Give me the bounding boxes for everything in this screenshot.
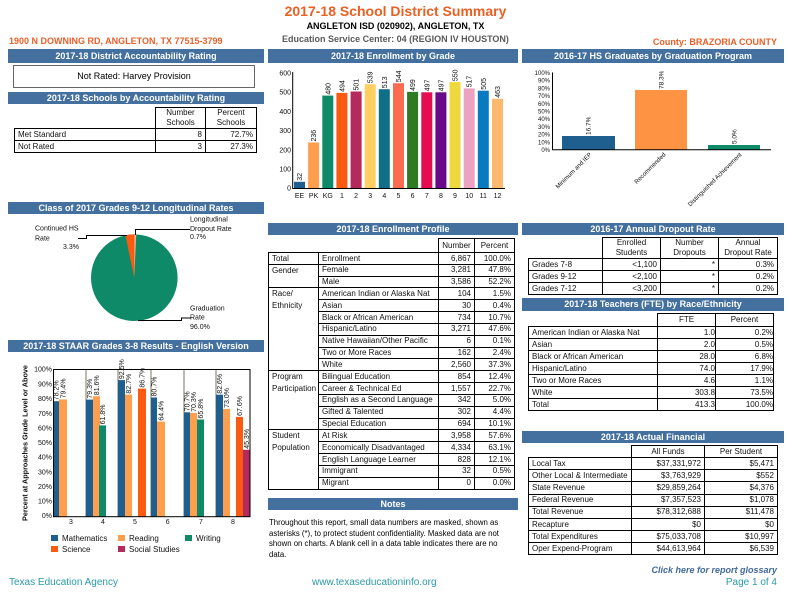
address: 1900 N DOWNING RD, ANGLETON, TX 77515-3799 (9, 36, 223, 46)
notes text: Throughout this report, small data numbers are masked, shown as (269, 518, 498, 527)
heading: longitudinal rates (8, 202, 264, 214)
bar chart: STAAR results: 79.3% (87, 379, 94, 399)
table: enrollment profile: Native Hawaiian/Other Pacific (322, 336, 428, 345)
table: financial: $1,078 (750, 495, 774, 504)
table: enrollment profile: 3,958 (451, 431, 471, 440)
table: enrollment profile: 6,867 (451, 254, 471, 263)
table: enrollment profile: 694 (458, 419, 471, 428)
table: enrollment profile: Ethnicity (272, 301, 302, 310)
rating box: Not Rated: Harvey Provision (77, 71, 191, 81)
table: schools by rating: Percent (217, 108, 245, 117)
table: financial: $29,859,264 (656, 483, 701, 492)
legend (51, 534, 221, 554)
heading: schools by accountability rating (8, 92, 264, 104)
table: dropout rate: Annual (736, 238, 760, 247)
table: dropout rate: Enrolled (617, 238, 646, 247)
bar chart: enrollment by grade: 7 (425, 193, 429, 200)
pie chart: longitudinal rates: Graduation (190, 306, 225, 312)
table: enrollment profile: White (322, 360, 342, 369)
table: teachers: 0.2% (755, 328, 773, 336)
table: financial: Total Expenditures (532, 532, 598, 541)
bar chart: enrollment by grade: 5 (397, 193, 401, 200)
bar chart: graduates by program: 16.7% (586, 116, 592, 135)
notes text: data. (269, 550, 286, 559)
table: enrollment profile: 104 (458, 289, 471, 298)
table: enrollment profile: 6 (467, 336, 471, 345)
table: enrollment profile: 828 (458, 455, 471, 464)
table: enrollment profile: Career & Technical Ed (322, 384, 401, 393)
table: enrollment profile: Asian (322, 301, 342, 310)
bar chart: graduates by program: 80% (538, 86, 551, 92)
table: dropout rate: Dropouts (673, 248, 706, 257)
table: enrollment profile: Male (322, 277, 339, 286)
bar chart: enrollment by grade: 2 (354, 193, 358, 200)
table: teachers: Black or African American (532, 352, 623, 360)
pie chart: longitudinal rates (35, 216, 232, 331)
table: financial: Federal Revenue (532, 495, 593, 504)
table: enrollment profile: Economically Disadvantaged (322, 443, 425, 452)
table: enrollment profile (268, 238, 515, 490)
table: enrollment profile: Bilingual Education (322, 372, 390, 381)
table: enrollment profile: English Language Learner (322, 455, 416, 464)
table: enrollment profile: 0.5% (493, 466, 511, 475)
bar chart: STAAR results: 10% (38, 498, 52, 506)
table: enrollment profile: 1,557 (451, 384, 471, 393)
bar chart: STAAR results: 6 (166, 519, 170, 526)
table: financial: Oper Expend-Program (532, 544, 612, 553)
rating box (13, 65, 255, 88)
table: enrollment profile: 3,586 (451, 277, 471, 286)
table: dropout rate: Grades 9-12 (532, 272, 576, 280)
table: dropout rate: * (712, 272, 715, 280)
heading: teachers (522, 298, 784, 311)
table: dropout rate: Grades 7-12 (532, 284, 576, 292)
bar chart: STAAR results: 8 (231, 519, 235, 526)
legend: Science (62, 545, 91, 554)
bar chart: enrollment by grade: 517 (467, 76, 474, 87)
footer: agency: Texas Education Agency (9, 577, 118, 588)
bar chart: STAAR results: 5 (133, 519, 137, 526)
bar chart: graduates by program: 40% (538, 117, 551, 123)
bar chart: STAAR results: 70% (38, 411, 52, 418)
table: teachers: American Indian or Alaska Nat (532, 328, 640, 336)
table: dropout rate: 0.3% (756, 260, 774, 268)
table: enrollment profile: Special Education (322, 419, 386, 428)
table: enrollment profile: 47.8% (488, 265, 511, 274)
table: teachers: 74.0 (699, 364, 715, 372)
pie chart: longitudinal rates: 0.7% (190, 234, 206, 241)
bar chart: graduates by program: Recommended (633, 151, 667, 186)
title: 2017-18 School District Summary (285, 3, 506, 19)
bar chart: STAAR results: Percent at Approaches Grade Level or Above (22, 365, 30, 521)
table: dropout rate: <2,100 (632, 272, 657, 280)
heading: notes: Notes (380, 499, 406, 509)
bar chart: graduates by program: 5.0% (732, 129, 738, 144)
table: teachers: 303.8 (695, 388, 715, 396)
pie chart: longitudinal rates: 3.3% (63, 244, 79, 251)
table: enrollment profile: 12.4% (488, 372, 511, 381)
table: teachers: White (532, 388, 552, 396)
bar chart: STAAR results: 100% (34, 366, 52, 374)
bar chart: STAAR results: 82.7% (126, 374, 133, 394)
table: teachers: FTE (679, 315, 694, 324)
table: enrollment profile: Migrant (322, 478, 349, 487)
table: schools by rating: Number (166, 108, 195, 117)
bar chart: STAAR results: 70.7% (184, 391, 192, 411)
table: schools by rating: 8 (198, 130, 202, 138)
table: enrollment profile: Gifted & Talented (322, 407, 383, 416)
education service center: Education Service Center: 04 (REGION IV HOUSTON) (282, 34, 509, 44)
table: financial: $4,376 (750, 483, 774, 492)
bar chart: STAAR results: 90% (38, 382, 52, 388)
bar chart: enrollment by grade: 539 (368, 71, 375, 83)
table: teachers: 0.5% (755, 340, 773, 348)
table: enrollment profile: 342 (458, 395, 471, 404)
bar chart: enrollment by grade: 400 (279, 109, 291, 116)
table: financial: Per Student (720, 447, 762, 456)
bar chart: enrollment by grade: 494 (339, 80, 346, 92)
table: enrollment profile: Program (272, 372, 303, 381)
bar chart: enrollment by grade: 8 (439, 193, 443, 200)
bar chart: STAAR results: 65.8% (198, 399, 205, 418)
table: schools by rating: Schools (166, 118, 195, 127)
legend: Social Studies (129, 545, 180, 554)
bar chart: STAAR results: 67.6% (237, 396, 244, 416)
bar chart: graduates by program: 0% (541, 148, 551, 154)
table: financial: $5,471 (750, 459, 774, 468)
table: enrollment profile: 4.4% (493, 407, 511, 416)
table: financial: $0 (692, 520, 701, 529)
table: financial: $75,033,708 (656, 532, 701, 541)
table: enrollment profile: 22.7% (488, 384, 511, 393)
table: schools by rating (14, 107, 257, 153)
table: enrollment profile: Hispanic/Latino (322, 324, 377, 333)
bar chart: enrollment by grade: 4 (382, 193, 386, 200)
heading: dropout rate: 2016-17 Annual Dropout Rate (590, 224, 716, 234)
table: financial: $0 (765, 520, 774, 529)
table: enrollment profile: 3,281 (451, 265, 471, 274)
table: teachers: 2.0 (704, 340, 715, 348)
table: enrollment profile: 32 (462, 466, 471, 475)
bar chart: STAAR results: 60% (38, 426, 52, 432)
heading: enrollment by grade (268, 49, 518, 63)
table: enrollment profile: 0 (467, 478, 471, 487)
bar chart: enrollment by grade: 544 (396, 70, 403, 82)
table: enrollment profile: 302 (458, 407, 471, 416)
bar chart: STAAR results: 73.0% (224, 388, 231, 408)
table: teachers: Percent (731, 315, 758, 324)
glossary link: Click here for report glossary (651, 565, 777, 575)
heading: district accountability rating (8, 49, 264, 63)
table: teachers: 73.5% (750, 388, 773, 396)
bar chart: STAAR results: 80% (38, 396, 52, 403)
table: dropout rate (528, 237, 778, 295)
table: enrollment profile: Race/ (272, 289, 293, 298)
table: enrollment profile: Participation (272, 384, 316, 393)
bar chart: enrollment by grade: 550 (452, 69, 460, 81)
bar chart: enrollment by grade: 1 (340, 193, 344, 200)
table: enrollment profile: 854 (458, 372, 471, 381)
table: enrollment profile: At Risk (322, 431, 347, 440)
heading: teachers: 2017-18 Teachers (FTE) by Race/Ethnicity (564, 299, 742, 309)
table: teachers: 28.0 (699, 352, 715, 360)
table: schools by rating: Schools (217, 118, 245, 127)
table: dropout rate: <1,100 (632, 260, 657, 268)
table: financial: $7,357,523 (661, 495, 701, 504)
table: enrollment profile: Percent (481, 241, 508, 250)
bar chart: STAAR results: 86.7% (140, 368, 146, 388)
bar chart: enrollment by grade: 9 (453, 193, 457, 200)
bar chart: STAAR results: 78.2% (54, 380, 60, 400)
table: enrollment profile: Female (322, 265, 349, 274)
table: enrollment profile: 162 (458, 348, 471, 357)
pie chart: longitudinal rates: 96.0% (190, 324, 210, 331)
table: financial: Local Tax (532, 459, 566, 468)
bar chart: STAAR results (22, 359, 251, 554)
pie chart: longitudinal rates: Rate (190, 314, 205, 322)
table: teachers: Two or More Races (532, 376, 601, 384)
bar chart: STAAR results: 81.6% (94, 375, 101, 395)
bar chart: STAAR results: 92.5% (119, 359, 126, 379)
bar chart: enrollment by grade: 463 (495, 86, 502, 98)
table: enrollment profile: 0.4% (493, 301, 511, 310)
county: County: BRAZORIA COUNTY (653, 37, 777, 47)
table: financial: State Revenue (532, 483, 585, 492)
heading: schools by accountability rating: 2017-18 Schools by Accountability Rating (47, 93, 225, 103)
bar chart: graduates by program: 10% (538, 140, 551, 146)
table: enrollment profile: Two or More Races (322, 348, 391, 357)
bar chart: STAAR results: 79.4% (60, 379, 68, 398)
bar chart: enrollment by grade: 505 (481, 78, 488, 90)
table: enrollment profile: 37.3% (488, 360, 511, 369)
bar chart: STAAR results: 20% (38, 484, 52, 491)
table: enrollment profile: Enrollment (322, 254, 360, 263)
table: financial: $6,539 (750, 544, 774, 553)
table: financial: $552 (756, 471, 774, 480)
bar chart: STAAR results: 80.7% (152, 377, 158, 396)
table: enrollment profile: Total (272, 254, 289, 263)
table: dropout rate: Students (616, 248, 647, 257)
table: enrollment profile: Number (442, 241, 471, 250)
table: dropout rate: Number (675, 238, 704, 247)
heading: graduates by program: 2016-17 HS Graduates by Graduation Program (554, 51, 752, 61)
table: dropout rate: * (712, 260, 715, 268)
table: financial: Recapture (532, 520, 569, 529)
table: financial: All Funds (651, 447, 685, 456)
bar chart: enrollment by grade (279, 69, 505, 200)
table: enrollment profile: 1.5% (493, 289, 511, 298)
table: teachers: 17.9% (750, 364, 773, 372)
table: teachers: Hispanic/Latino (532, 364, 587, 372)
legend: Reading (129, 534, 159, 543)
district name: ANGLETON ISD (020902), ANGLETON, TX (307, 21, 484, 31)
table: teachers: Asian (532, 340, 552, 348)
heading: dropout rate (522, 223, 784, 235)
heading: enrollment by grade: 2017-18 Enrollment by Grade (331, 51, 455, 61)
bar chart: enrollment by grade: 11 (480, 193, 487, 200)
bar chart: enrollment by grade: 6 (411, 193, 415, 200)
bar chart: enrollment by grade: 513 (382, 76, 389, 88)
heading: graduates by program (522, 49, 784, 63)
table: dropout rate: Dropout Rate (724, 248, 772, 257)
table: dropout rate: 0.2% (756, 284, 774, 292)
table: teachers: 413.3 (695, 400, 715, 408)
table: enrollment profile: 4,334 (451, 443, 471, 452)
bar chart: enrollment by grade: KG (323, 193, 333, 200)
table: teachers (528, 313, 774, 411)
bar chart: enrollment by grade: 10 (465, 193, 473, 200)
bar chart: enrollment by grade: 300 (279, 128, 291, 135)
table: enrollment profile: English as a Second Language (322, 395, 433, 404)
bar chart: graduates by program: 50% (538, 110, 551, 116)
bar chart: STAAR results: 30% (38, 470, 52, 476)
table: enrollment profile: Student (272, 431, 300, 440)
bar chart: enrollment by grade: 497 (438, 80, 445, 91)
table: schools by rating: 72.7% (230, 130, 253, 138)
notes text (269, 518, 499, 559)
heading: financial (522, 431, 784, 443)
bar chart: enrollment by grade: 500 (279, 90, 291, 96)
table: teachers: 1.1% (755, 376, 773, 384)
table: enrollment profile: 2,560 (451, 360, 471, 369)
table: financial: $37,331,972 (656, 459, 701, 468)
bar chart: graduates by program: 20% (538, 132, 551, 138)
table: dropout rate: Grades 7-8 (532, 260, 572, 268)
table: enrollment profile: 3,271 (451, 324, 471, 333)
bar chart: enrollment by grade: 0 (287, 186, 291, 192)
pie chart: longitudinal rates: Longitudinal (190, 216, 228, 224)
table: schools by rating: Not Rated (18, 142, 54, 150)
table: financial: Total Revenue (532, 507, 583, 516)
table: dropout rate: * (712, 284, 715, 292)
table: teachers: 1.0 (704, 328, 715, 336)
bar chart: enrollment by grade: PK (309, 193, 319, 200)
bar chart: enrollment by grade: 236 (311, 130, 318, 142)
footer: website: www.texaseducationinfo.org (312, 577, 437, 588)
bar chart: enrollment by grade: EE (295, 193, 304, 200)
bar chart: graduates by program: 100% (535, 71, 551, 77)
table: enrollment profile: 2.4% (493, 348, 511, 357)
heading: enrollment profile: 2017-18 Enrollment Profile (336, 224, 450, 234)
pie chart: longitudinal rates: Rate (35, 236, 50, 242)
bar chart: graduates by program: 90% (538, 78, 551, 84)
bar chart: enrollment by grade: 501 (354, 79, 361, 90)
bar chart: graduates by program: Distinguished Achievement (687, 151, 744, 208)
bar chart: enrollment by grade: 499 (410, 79, 417, 91)
notes text: shown on charts. A blank cell in a data table indicates there are no (269, 539, 497, 548)
table: schools by rating: Met Standard (18, 130, 66, 138)
bar chart: STAAR results: 64.4% (158, 401, 166, 421)
bar chart: graduates by program: 78.3% (658, 70, 666, 89)
legend: Writing (196, 534, 221, 543)
table: enrollment profile: Gender (272, 266, 299, 275)
table: enrollment profile: 10.1% (488, 419, 511, 428)
table: enrollment profile: Immigrant (322, 466, 358, 475)
heading: longitudinal rates: Class of 2017 Grades 9-12 Longitudinal Rates (38, 203, 234, 213)
bar chart: enrollment by grade: 3 (368, 193, 372, 200)
pie chart: longitudinal rates: Dropout Rate (190, 226, 232, 233)
table: financial: Other Local & Intermediate (532, 471, 628, 480)
bar chart: enrollment by grade: 600 (279, 70, 291, 78)
table: enrollment profile: 30 (462, 301, 471, 310)
bar chart: enrollment by grade: 480 (325, 83, 332, 95)
table: enrollment profile: 12.1% (488, 455, 511, 464)
bar chart: STAAR results: 61.8% (100, 405, 107, 424)
bar chart: STAAR results: 50% (38, 440, 52, 447)
table: enrollment profile: 734 (458, 313, 471, 322)
table: enrollment profile: 0.0% (493, 478, 511, 487)
footer: page number: Page 1 of 4 (726, 577, 777, 588)
table: enrollment profile: 57.6% (488, 431, 511, 440)
table: enrollment profile: Black or African American (322, 313, 413, 322)
heading: STAAR results: 2017-18 STAAR Grades 3-8 Results - English Version (23, 341, 249, 351)
bar chart: enrollment by grade: 32 (297, 173, 304, 181)
bar chart: graduates by program: 60% (538, 102, 551, 108)
heading: district accountability rating: 2017-18 District Accountability Rating (55, 51, 217, 61)
table: enrollment profile: 63.1% (488, 443, 511, 452)
table: enrollment profile: 100.0% (484, 254, 511, 263)
bar chart: STAAR results: 70.3% (191, 392, 198, 412)
bar chart: STAAR results: 3 (69, 519, 73, 526)
bar chart: STAAR results: 82.6% (217, 374, 224, 394)
bar chart: STAAR results: 7 (199, 519, 203, 526)
bar chart: STAAR results: 4 (101, 519, 105, 526)
table: enrollment profile: 52.2% (488, 277, 511, 286)
heading: enrollment profile (268, 223, 518, 235)
table: financial: $44,613,964 (656, 544, 701, 553)
notes text: asterisks (*), to protect student confidentiality. Masked data are not (269, 529, 499, 538)
table: enrollment profile: Population (272, 443, 310, 452)
bar chart: graduates by program: 30% (538, 125, 551, 131)
heading: financial: 2017-18 Actual Financial (601, 432, 705, 442)
table: teachers: 4.6 (704, 376, 715, 384)
table: dropout rate: 0.2% (756, 272, 774, 280)
bar chart: enrollment by grade: 497 (424, 80, 431, 91)
table: enrollment profile: 10.7% (488, 313, 511, 322)
table: financial: $10,997 (745, 532, 774, 541)
table: enrollment profile: American Indian or Alaska Nat (322, 289, 430, 298)
table: teachers: 6.8% (755, 352, 773, 360)
bar chart: enrollment by grade: 12 (494, 193, 501, 200)
table: enrollment profile: 5.0% (493, 395, 511, 404)
bar chart: enrollment by grade: 200 (279, 148, 291, 154)
bar chart: STAAR results: 45.3% (244, 429, 251, 449)
bar chart: graduates by program: Minimum and IEP (554, 151, 593, 190)
table: schools by rating: 3 (198, 142, 202, 150)
table: enrollment profile: 47.6% (488, 324, 511, 333)
legend: Mathematics (62, 534, 107, 543)
table: financial: $3,763,929 (661, 471, 701, 480)
table: financial (528, 445, 778, 555)
bar chart: STAAR results: 0% (42, 513, 52, 520)
bar chart: enrollment by grade: 100 (279, 166, 291, 174)
table: dropout rate: <3,200 (632, 284, 657, 292)
table: teachers: 100.0% (746, 400, 773, 408)
bar chart: graduates by program: 70% (538, 94, 551, 100)
bar chart: STAAR results: 40% (38, 454, 52, 462)
table: enrollment profile: 0.1% (493, 336, 511, 345)
table: financial: $78,312,688 (656, 507, 701, 516)
heading: notes (268, 498, 518, 510)
pie chart: longitudinal rates: Continued HS (35, 226, 79, 232)
table: financial: $11,478 (746, 507, 774, 516)
table: schools by rating: 27.3% (230, 142, 253, 150)
bar chart: graduates by program (535, 70, 771, 208)
table: teachers: Total (532, 400, 549, 408)
